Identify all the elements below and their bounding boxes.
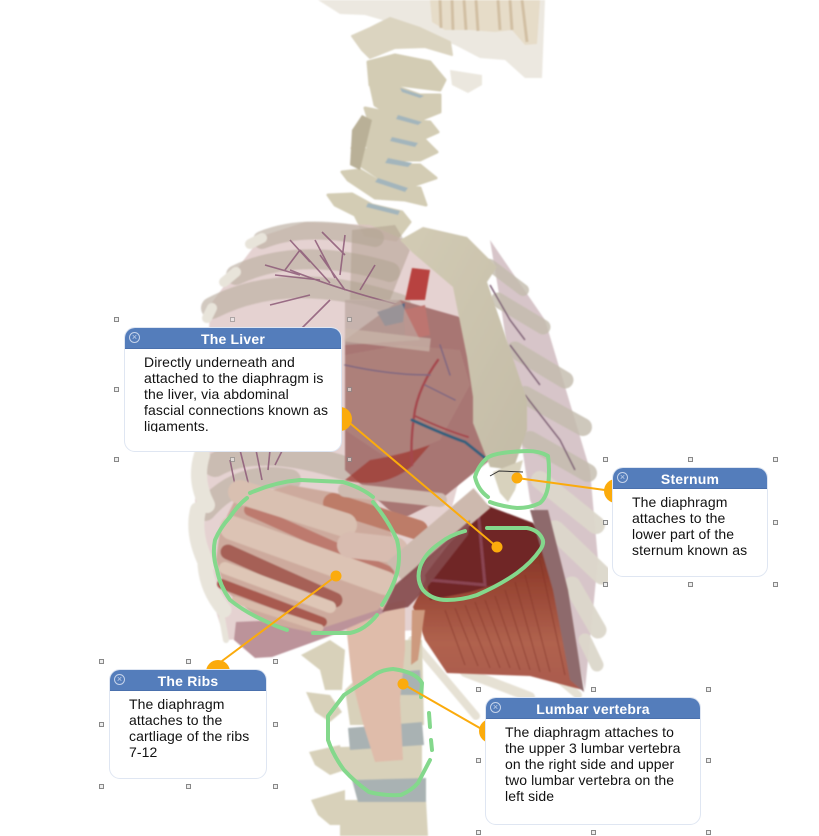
lumbar spine bbox=[301, 600, 428, 836]
callout connectors bbox=[206, 407, 628, 743]
callout: The Ribs: × bbox=[117, 674, 122, 684]
callout: Sternum: lower part of the bbox=[632, 526, 734, 542]
callout: Lumbar vertebra: left side bbox=[505, 788, 554, 804]
callout: Lumbar vertebra: × bbox=[493, 702, 498, 712]
callout: The Ribs: attaches to the bbox=[129, 712, 222, 728]
callout: The Liver: the liver, via abdominal bbox=[144, 386, 289, 402]
callout: Sternum: × bbox=[620, 472, 625, 482]
callout: Lumbar vertebra bbox=[485, 697, 701, 825]
callout: The Ribs: The diaphragm bbox=[129, 696, 224, 712]
selection handles bbox=[99, 317, 778, 835]
long lower ribs bbox=[412, 640, 578, 716]
connector: sternum bbox=[512, 472, 628, 503]
callout: Lumbar vertebra: Lumbar vertebra bbox=[536, 701, 650, 717]
callout: The Liver bbox=[124, 327, 342, 452]
connector: lumbar bbox=[398, 678, 503, 743]
circle: diaphragm bbox=[419, 528, 543, 600]
green hand-drawn circles bbox=[214, 451, 549, 795]
callout: Lumbar vertebra: two lumbar vertebra on the bbox=[505, 772, 674, 788]
callout: Lumbar vertebra: the upper 3 lumbar vertebra bbox=[505, 740, 680, 756]
connector: liver bbox=[328, 407, 502, 552]
callout: The Liver: × bbox=[132, 332, 137, 342]
intervertebral discs bbox=[348, 670, 426, 802]
callout: The Liver: attached to the diaphragm is bbox=[144, 370, 323, 386]
callout: Sternum: attaches to the bbox=[632, 510, 725, 526]
circle: sternum bbox=[475, 451, 549, 508]
xiphoid outline bbox=[490, 471, 523, 476]
circle: ribs bbox=[214, 480, 399, 633]
lumbar vertebral bodies bbox=[301, 640, 428, 836]
sternum bbox=[400, 227, 527, 502]
back of rib cage, left bbox=[195, 222, 480, 640]
callout: Sternum: The diaphragm bbox=[632, 494, 727, 510]
callout: The Ribs: The Ribs bbox=[158, 673, 218, 689]
lung vessels bbox=[230, 232, 400, 490]
callout: Sternum: sternum known as bbox=[632, 542, 747, 558]
heart and liver region bbox=[345, 268, 490, 520]
circle: lumbar bbox=[328, 669, 432, 795]
callout: The Ribs bbox=[109, 669, 267, 779]
callout: Sternum: Sternum bbox=[661, 471, 719, 487]
callout: The Liver: The Liver bbox=[201, 331, 265, 347]
callout: The Ribs: cartliage of the ribs bbox=[129, 728, 249, 744]
callout: Lumbar vertebra: The diaphragm attaches to bbox=[505, 724, 674, 740]
connector: ribs bbox=[206, 570, 342, 684]
cervical vertebrae bbox=[328, 55, 445, 240]
callout: The Liver: Directly underneath and bbox=[144, 354, 295, 370]
callout: Sternum bbox=[612, 467, 768, 577]
callout: The Liver: fascial connections known as bbox=[144, 402, 328, 418]
callout: The Ribs: 7-12 bbox=[129, 744, 157, 760]
psoas muscle bbox=[345, 600, 405, 762]
skull and jaw bbox=[318, 0, 545, 93]
diaphragm muscle bbox=[413, 503, 584, 692]
callout: Lumbar vertebra: on the right side and upper bbox=[505, 756, 674, 772]
lower left rib region bbox=[216, 485, 482, 658]
right ribs and pleura bbox=[490, 240, 602, 690]
